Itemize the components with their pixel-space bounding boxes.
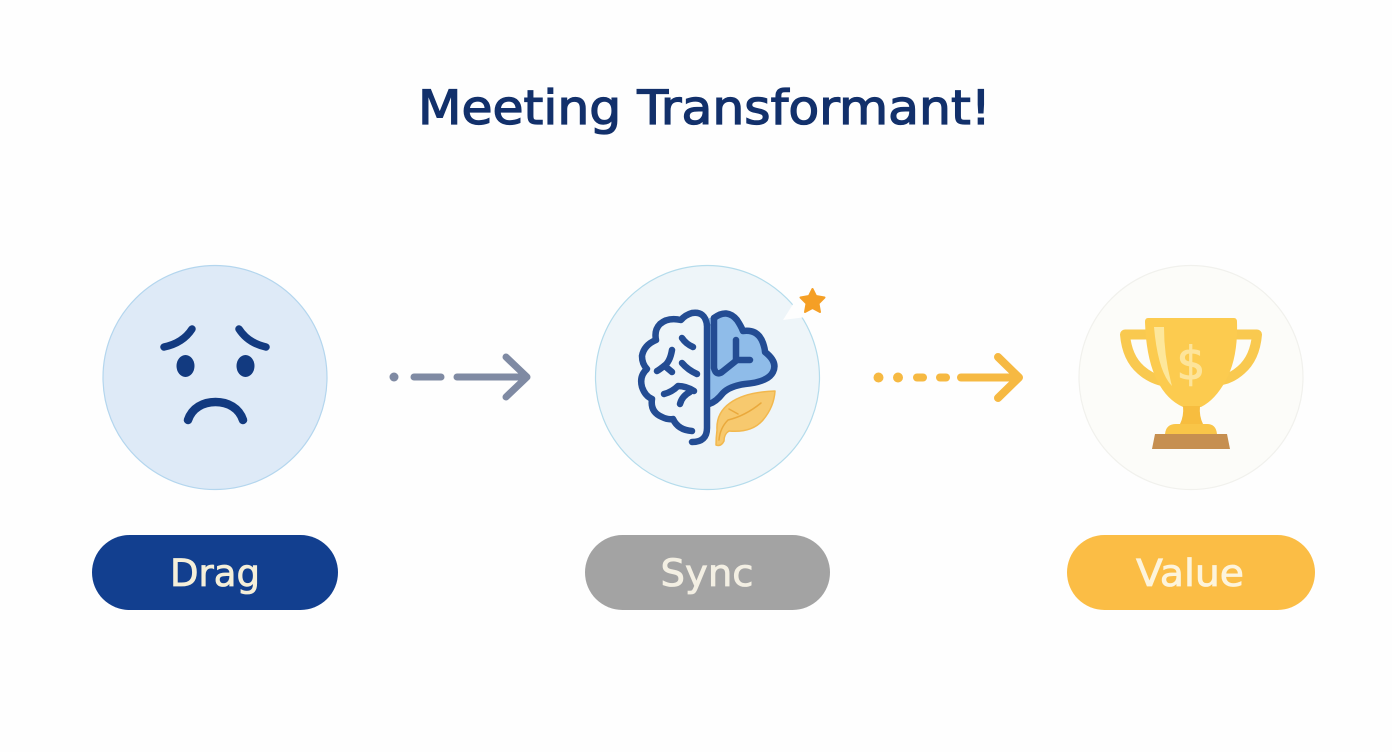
- title: Meeting Transformant!: [418, 81, 991, 136]
- circle: value background: [1079, 266, 1303, 490]
- trophy plinth: [1152, 434, 1230, 449]
- trophy dollar sign: $: [1177, 337, 1205, 390]
- arrow: grey dashed: [390, 357, 527, 397]
- icon: leaf: [716, 391, 775, 446]
- icon: white notch behind star: [783, 301, 806, 320]
- icon: brain: [641, 313, 774, 442]
- circle: drag background: [103, 266, 327, 490]
- panel: sync stage: [585, 266, 830, 610]
- label pill: Value: Value: [1136, 552, 1244, 595]
- label pill: Drag: [92, 535, 338, 610]
- icon: sad face: [164, 329, 266, 420]
- circle: sync background: [596, 266, 820, 490]
- panel: drag stage: [92, 266, 338, 610]
- trophy shine: [1154, 327, 1172, 386]
- panel: value stage: [1067, 266, 1315, 610]
- label pill: Sync: Sync: [660, 552, 754, 595]
- label pill: Drag: Drag: [170, 552, 260, 595]
- arrow: amber dotted: [874, 357, 1019, 398]
- icon: trophy: [1125, 318, 1257, 449]
- trophy cup: [1145, 318, 1237, 407]
- label pill: Value: [1067, 535, 1315, 610]
- label pill: Sync: [585, 535, 830, 610]
- trophy foot: [1165, 424, 1217, 434]
- icon: star: [800, 289, 824, 312]
- trophy stem: [1180, 406, 1203, 424]
- trophy handles: [1125, 334, 1162, 381]
